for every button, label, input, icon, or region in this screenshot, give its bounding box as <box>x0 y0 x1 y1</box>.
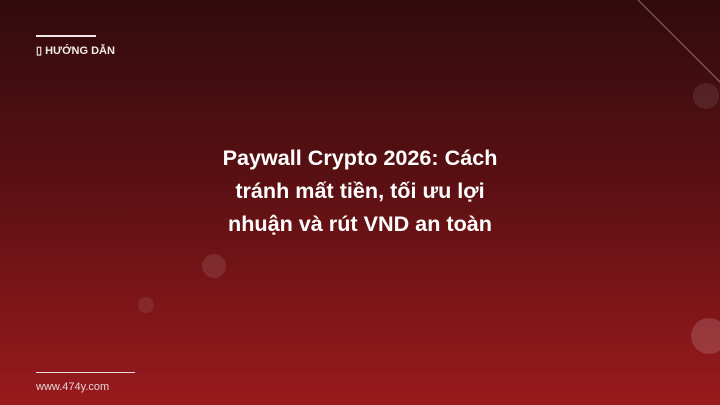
title: tránh mất tiền, tối ưu lợi <box>235 178 485 203</box>
title: nhuận và rút VND an toàn <box>228 211 492 236</box>
category label: ▯ HƯỚNG DẪN <box>36 45 115 57</box>
title: Paywall Crypto 2026: Cách <box>223 145 497 170</box>
title <box>223 145 497 236</box>
footer: www.474y.com <box>36 381 109 393</box>
decorative circles <box>138 83 720 354</box>
